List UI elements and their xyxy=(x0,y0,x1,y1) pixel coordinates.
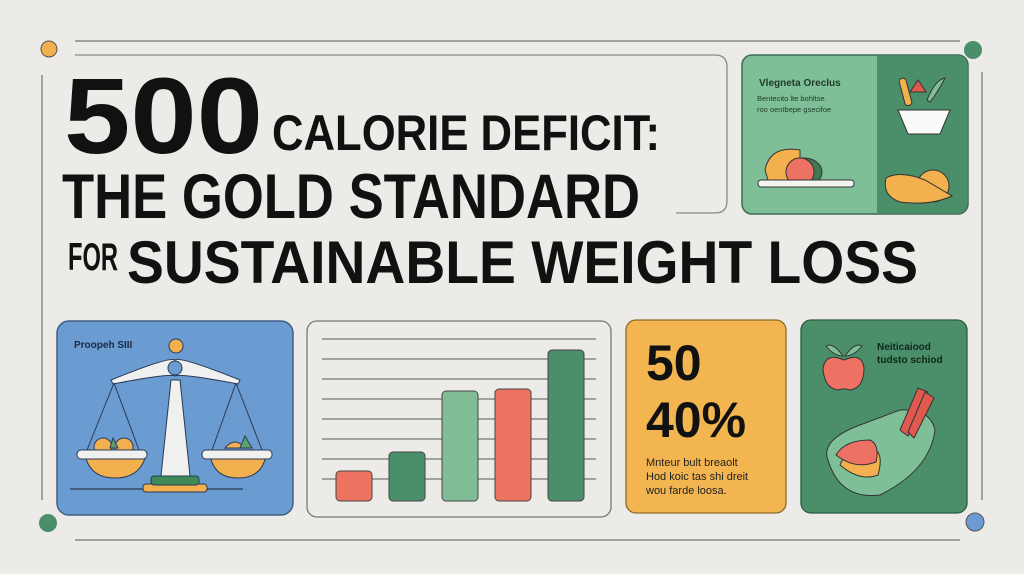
title: 500 xyxy=(64,55,263,176)
text: panel body: Bentecito lte bohltse. xyxy=(757,94,827,103)
title: FOR xyxy=(68,236,118,279)
icon: plate with food xyxy=(827,388,935,496)
panel: scale xyxy=(57,321,293,515)
dot: top-left xyxy=(41,41,57,57)
bars xyxy=(336,350,584,501)
panel: bar chart xyxy=(307,321,611,517)
panel: vegetable dishes xyxy=(742,55,968,214)
text: panel body: roo oentbepe gsecifoe xyxy=(757,105,831,114)
icon: apple xyxy=(823,345,864,390)
title: CALORIE DEFICIT: xyxy=(272,105,660,161)
panel: stats xyxy=(626,320,786,513)
icon: balance scale xyxy=(70,339,272,492)
dot: top-right xyxy=(964,41,982,59)
text: panel heading: Vlegneta Oreclus xyxy=(759,78,841,89)
title xyxy=(62,55,918,296)
title: THE GOLD STANDARD xyxy=(62,162,640,232)
text: panel heading: Proopeh SIII xyxy=(74,340,133,351)
text: panel heading: Neiticaiood xyxy=(877,342,931,353)
dot: bottom-left xyxy=(39,514,57,532)
text: stats body: Hod koic tas shi dreit xyxy=(646,471,748,483)
icon: plate of vegetables xyxy=(758,149,854,187)
stat: 40%: 40% xyxy=(646,392,746,448)
text: stats body: Mnteur bult breaolt xyxy=(646,457,738,469)
panel: nutrition xyxy=(801,320,967,513)
text: panel heading: tudsto schiod xyxy=(877,355,943,366)
title frame xyxy=(75,55,727,213)
icon: bowl xyxy=(898,77,950,134)
dot: bottom-right xyxy=(966,513,984,531)
text: stats body: wou farde loosa. xyxy=(645,485,727,497)
stat: 50: 50 xyxy=(646,335,702,391)
icon: squash xyxy=(885,170,952,203)
title: SUSTAINABLE WEIGHT LOSS xyxy=(127,229,918,296)
